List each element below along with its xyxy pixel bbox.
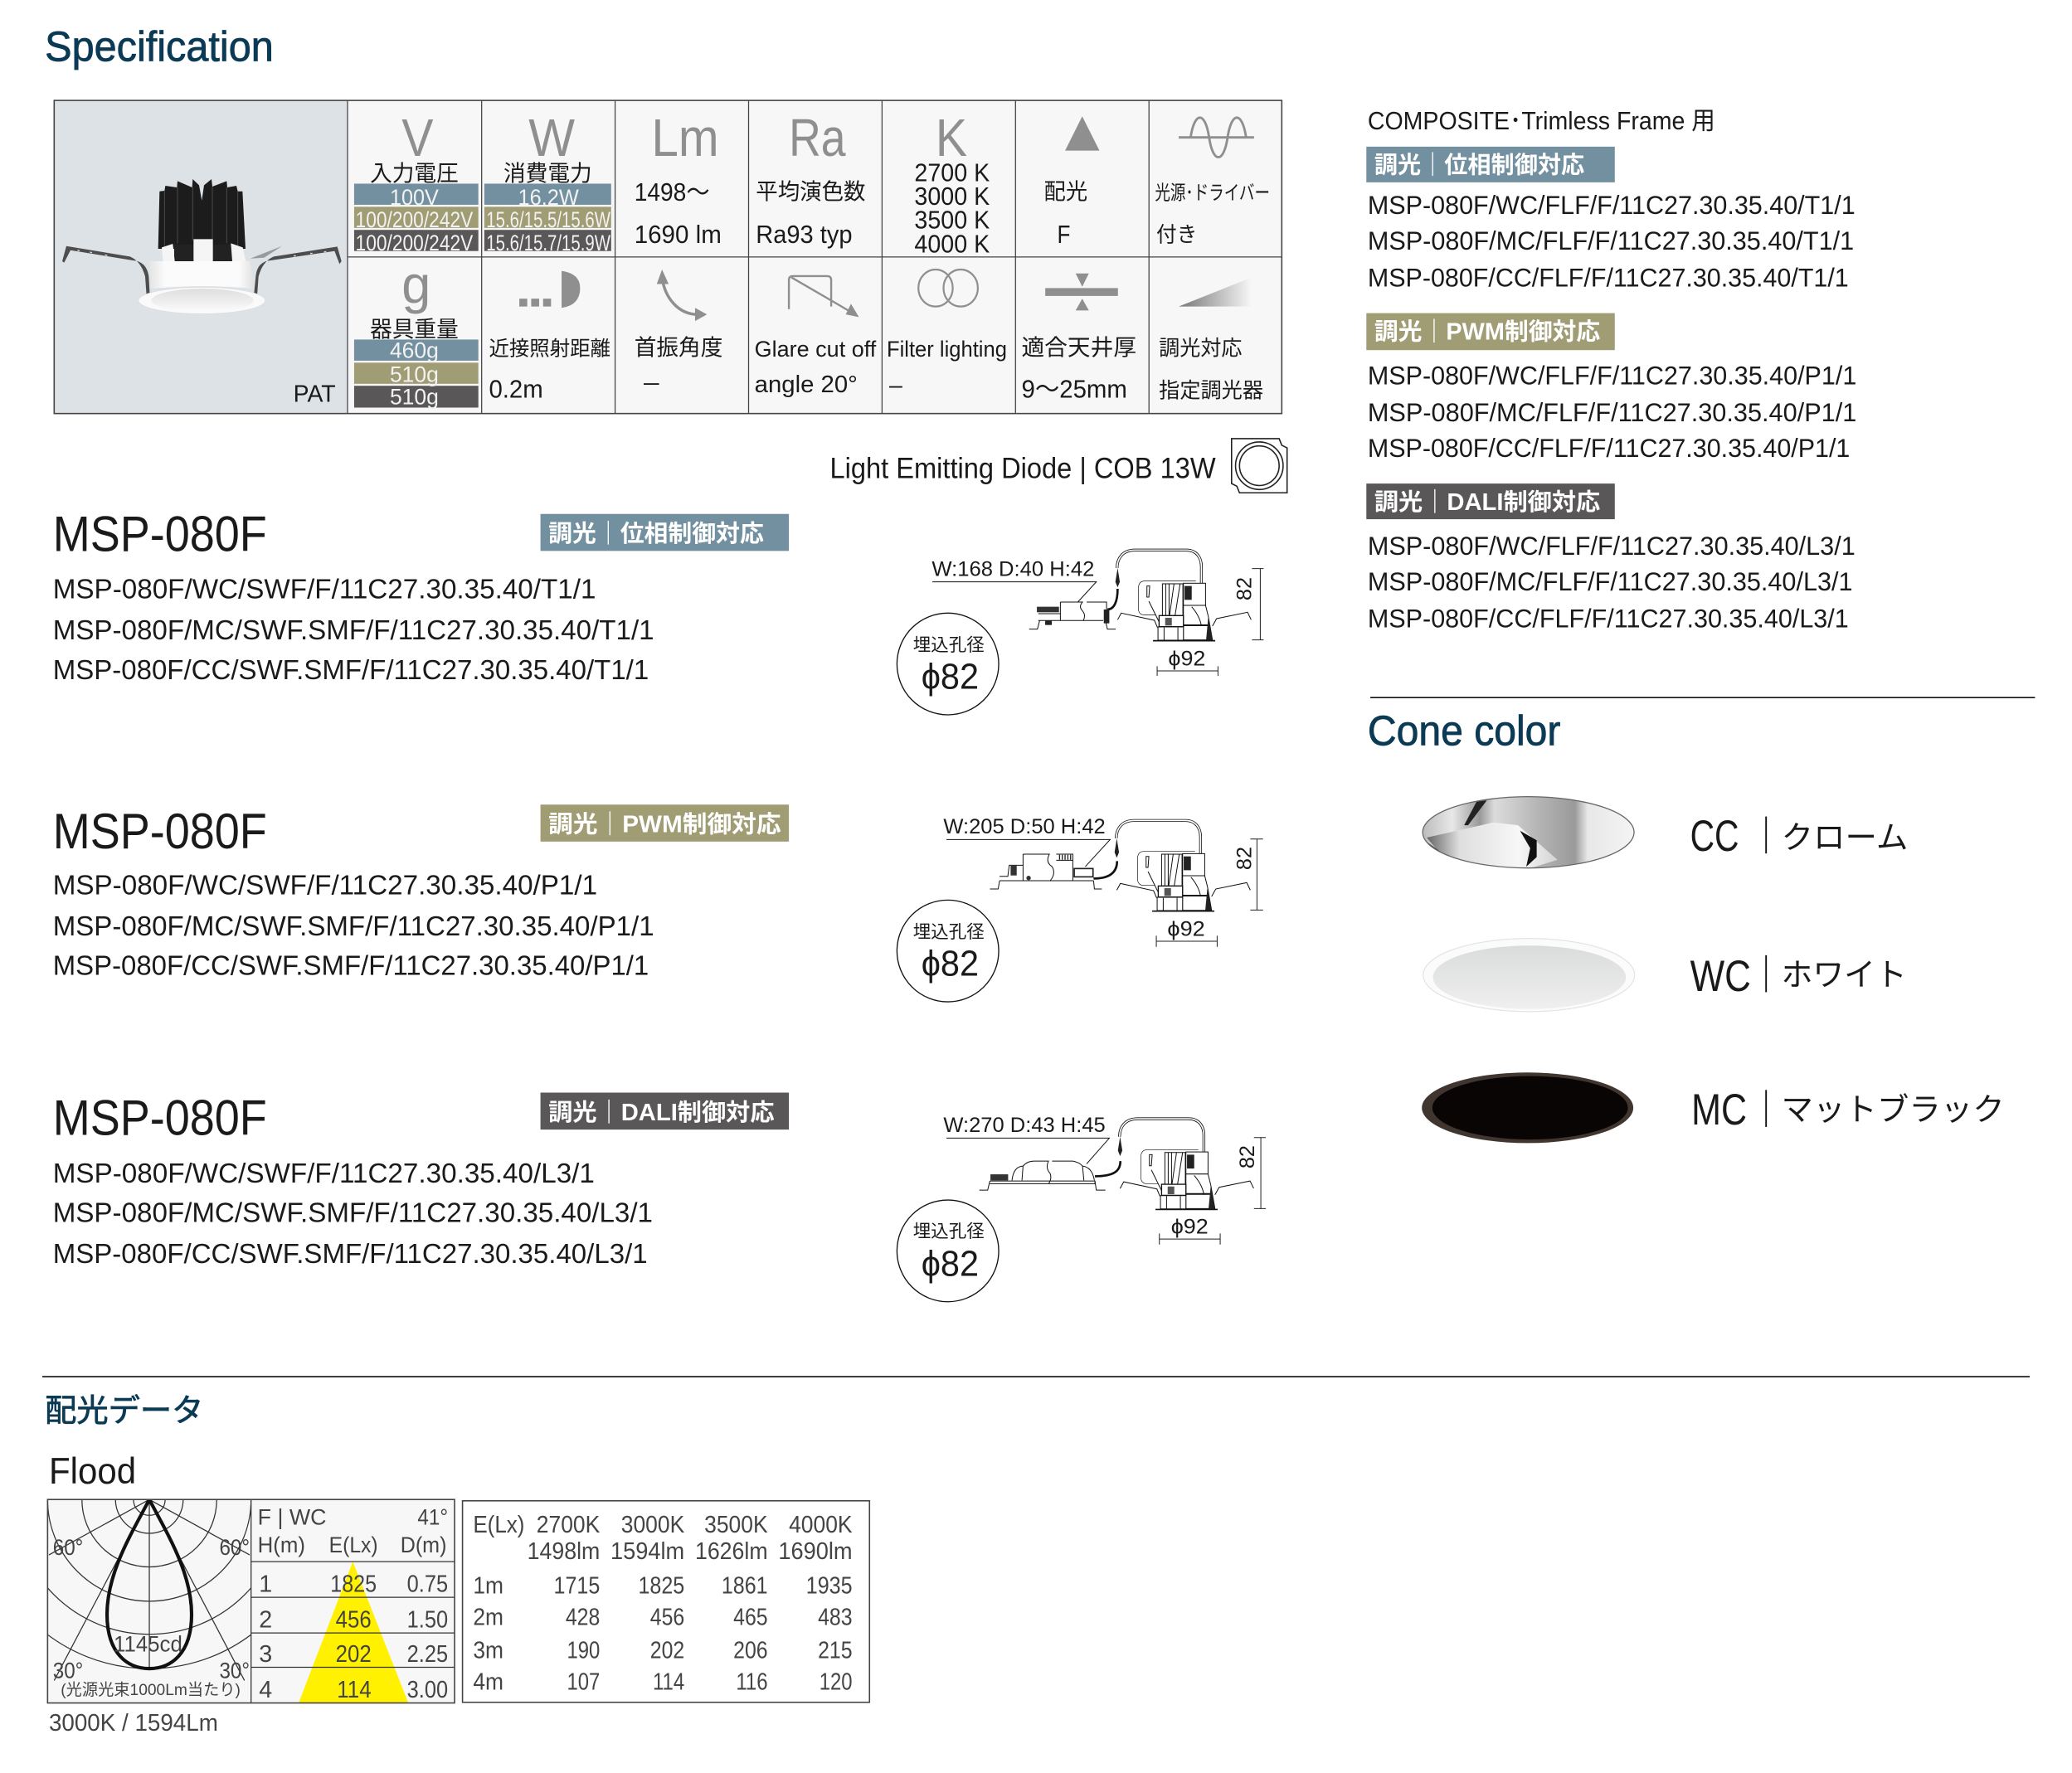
spec: close distance: 近接照射距離 — [489, 338, 610, 361]
model numbers — [53, 871, 654, 982]
table row 1m: 1m — [473, 1572, 503, 1599]
chart: illuminance cone table: D(m) — [401, 1532, 446, 1557]
spec: driver: 光源･ドライバー — [1155, 182, 1270, 205]
table row 4m: 107 — [567, 1669, 600, 1696]
spec: input voltage: 入力電圧 — [370, 160, 459, 186]
table header: 1594lm — [610, 1538, 684, 1565]
chart: polar light distribution: (光源光束1000Lm当たり) — [61, 1681, 241, 1699]
spec: filter lighting: Filter lighting — [887, 336, 1007, 362]
label: MC matte black: マットブラック — [1782, 1092, 2005, 1128]
panel: composite trimless frame models — [1366, 108, 1856, 634]
spec: power consumption — [484, 108, 611, 255]
spec: input voltage: 100/200/242V — [356, 230, 473, 255]
spec: tilt angle: − — [642, 373, 661, 396]
model numbers P1: MSP-080F/WC/FLF/F/11C27.30.35.40/P1/1 — [1368, 362, 1856, 391]
chart: illuminance cone table: 202 — [336, 1641, 372, 1668]
model numbers — [53, 575, 654, 686]
panel: flood chart — [46, 1499, 455, 1703]
spec: colour rendering — [756, 108, 865, 249]
tag: PWM control: 調光｜PWM制御対応 — [1374, 318, 1601, 345]
table row 3m — [473, 1637, 853, 1664]
model numbers T1: MSP-080F/WC/FLF/F/11C27.30.35.40/T1/1 — [1368, 191, 1856, 220]
label: WC white — [1690, 952, 1907, 1001]
heading: light distribution data: 配光データ — [45, 1393, 203, 1429]
tag: PWM control — [541, 804, 789, 842]
spec: glare cut off — [755, 276, 877, 398]
table row 4m: 114 — [653, 1669, 684, 1696]
block: DALI control model — [53, 1090, 1266, 1302]
table row 2m: 483 — [818, 1605, 853, 1631]
drawing: dimensions L3: ϕ92 — [1171, 1216, 1209, 1239]
label: WC white: ホワイト — [1782, 957, 1907, 993]
spec: luminous flux: Lm — [651, 108, 719, 168]
drawing: dimensions L3: W:270 D:43 H:45 — [943, 1114, 1106, 1137]
spec: tilt angle: 首振角度 — [635, 335, 722, 361]
heading: Cone color: Cone color — [1368, 707, 1560, 755]
spec: dimming: 指定調光器 — [1159, 380, 1263, 403]
table row 2m: 465 — [733, 1605, 768, 1631]
spec: weight: 器具重量 — [370, 316, 459, 342]
drawing: dimensions P1: 埋込孔径 — [913, 922, 985, 942]
chart: illuminance cone table: 2 — [259, 1607, 272, 1634]
model numbers T1: MSP-080F/MC/FLF/F/11C27.30.35.40/T1/1 — [1368, 226, 1854, 255]
table row 2m: 2m — [473, 1605, 503, 1631]
chart: polar light distribution: 30° — [53, 1657, 83, 1683]
table row 2m: 428 — [566, 1605, 600, 1631]
spec: power consumption: 16.2W — [518, 184, 579, 210]
spec: dimming: 調光対応 — [1159, 338, 1243, 361]
table row 2m: 456 — [650, 1605, 684, 1631]
model numbers: MSP-080F/MC/SWF.SMF/F/11C27.30.35.40/L3/1 — [53, 1198, 653, 1229]
model numbers: MSP-080F/WC/SWF/F/11C27.30.35.40/L3/1 — [53, 1159, 595, 1189]
panel: product photo — [54, 100, 348, 414]
tag: DALI control: 調光｜DALI制御対応 — [1374, 488, 1601, 516]
chart: polar light distribution: 60° — [219, 1534, 250, 1560]
model numbers L3: MSP-080F/CC/FLF/F/11C27.30.35.40/L3/1 — [1368, 605, 1849, 634]
spec: weight — [354, 255, 479, 410]
spec: weight: g — [401, 255, 430, 314]
drawing: dimensions P1: ϕ92 — [1167, 917, 1205, 940]
spec: input voltage — [354, 108, 479, 255]
chart: illuminance cone table — [251, 1499, 455, 1703]
label: CC chrome: クローム — [1782, 820, 1908, 856]
spec: tilt angle — [635, 270, 722, 396]
table row 3m: 202 — [650, 1637, 684, 1664]
label: WC white: WC — [1690, 952, 1751, 1001]
spec: input voltage: V — [401, 108, 434, 168]
model numbers: MSP-080F/CC/SWF.SMF/F/11C27.30.35.40/P1/1 — [53, 951, 649, 982]
spec: ceiling thickness — [1021, 274, 1136, 404]
model numbers — [53, 1159, 653, 1270]
spec: light distribution: F — [1057, 221, 1070, 249]
table header: 1498lm — [528, 1538, 600, 1565]
spec: colour temperature: 3500 K — [914, 207, 990, 235]
chart: illuminance cone table: 1.50 — [407, 1607, 448, 1634]
spec: ceiling thickness: 適合天井厚 — [1021, 335, 1136, 361]
model numbers T1: MSP-080F/CC/FLF/F/11C27.30.35.40/T1/1 — [1368, 264, 1849, 293]
spec: ceiling thickness: 9〜25mm — [1021, 376, 1127, 404]
table row 2m — [473, 1605, 853, 1631]
table header: 1690lm — [778, 1538, 853, 1565]
chart: illuminance cone table: E(Lx) — [329, 1532, 378, 1557]
swatch: matte black cone — [1422, 1072, 1633, 1143]
table row 3m: 206 — [733, 1637, 768, 1664]
chart: illuminance cone table: 456 — [336, 1607, 372, 1634]
spec: weight: 510g — [390, 384, 439, 410]
table row 4m: 4m — [473, 1669, 503, 1696]
chart: polar light distribution: 60° — [53, 1534, 83, 1560]
chart: illuminance cone table: 41° — [417, 1503, 448, 1529]
table row 3m: 3m — [473, 1637, 503, 1664]
table row 3m: 190 — [567, 1637, 600, 1664]
drawing: dimensions T1: 埋込孔径 — [913, 635, 985, 655]
spec: input voltage: 100V — [390, 184, 439, 210]
table header: E(Lx) — [473, 1512, 524, 1538]
table header — [473, 1512, 853, 1565]
tag: phase control — [1366, 147, 1615, 182]
model numbers L3: MSP-080F/WC/FLF/F/11C27.30.35.40/L3/1 — [1368, 532, 1856, 561]
spec: colour temperature: 4000 K — [914, 231, 990, 258]
table row 1m — [473, 1572, 853, 1599]
drawing: dimensions T1: ϕ92 — [1168, 647, 1205, 670]
tag: DALI control — [1366, 483, 1615, 519]
model numbers L3: MSP-080F/MC/FLF/F/11C27.30.35.40/L3/1 — [1368, 567, 1853, 596]
spec: filter lighting: − — [888, 376, 904, 399]
swatch: chrome cone — [1423, 797, 1634, 869]
drawing: dimensions P1: W:205 D:50 H:42 — [943, 815, 1106, 838]
model numbers P1: MSP-080F/MC/FLF/F/11C27.30.35.40/P1/1 — [1368, 398, 1856, 427]
spec: power consumption: 消費電力 — [503, 160, 592, 186]
chart: polar light distribution — [48, 1500, 250, 1698]
spec: colour temperature — [914, 108, 990, 258]
spec: glare cut off: Glare cut off — [755, 336, 877, 362]
model name: MSP-080F — [53, 1090, 267, 1146]
spec: colour rendering: 平均演色数 — [756, 179, 865, 205]
drawing: dimensions P1 — [897, 815, 1263, 1002]
chart: illuminance cone table: 4 — [259, 1677, 272, 1703]
drawing: dimensions P1: ϕ82 — [922, 944, 979, 984]
title: Specification: Specification — [45, 22, 274, 70]
model numbers: MSP-080F/WC/SWF/F/11C27.30.35.40/P1/1 — [53, 871, 597, 901]
spec: light distribution: 配光 — [1044, 179, 1087, 205]
spec: driver: 付き — [1156, 224, 1197, 247]
drawing: dimensions L3: 埋込孔径 — [913, 1222, 985, 1241]
spec: power consumption: 15.6/15.7/15.9W — [486, 230, 610, 255]
table header: 1626lm — [695, 1538, 768, 1565]
model numbers: MSP-080F/CC/SWF.SMF/F/11C27.30.35.40/L3/1 — [53, 1239, 648, 1270]
spec: colour temperature: 2700 K — [914, 159, 990, 187]
label: PAT: PAT — [294, 381, 336, 407]
spec: power consumption: 15.6/15.5/15.6W — [486, 206, 610, 232]
heading: Flood: Flood — [49, 1451, 136, 1492]
chart: illuminance cone table: F | WC — [258, 1503, 326, 1529]
table row 1m: 1825 — [638, 1572, 684, 1599]
tag: phase control: 調光｜位相制御対応 — [1374, 152, 1584, 179]
table row 1m: 1861 — [722, 1572, 768, 1599]
drawing: dimensions T1: 82 — [1233, 577, 1257, 600]
spec: luminous flux — [635, 108, 722, 249]
drawing: dimensions T1: W:168 D:40 H:42 — [931, 557, 1094, 580]
spec: colour rendering: Ra — [789, 108, 846, 168]
spec: driver — [1155, 118, 1270, 247]
spec: colour temperature: 3000 K — [914, 183, 990, 211]
model numbers: MSP-080F/WC/SWF/F/11C27.30.35.40/T1/1 — [53, 575, 596, 605]
spec: colour temperature: K — [936, 108, 967, 168]
tag: phase control: 調光｜位相制御対応 — [548, 520, 764, 547]
chart: illuminance cone table: 1 — [259, 1571, 272, 1598]
table row 4m: 120 — [820, 1669, 853, 1696]
chart: illuminance cone table: 2.25 — [407, 1641, 448, 1668]
tag: phase control — [541, 514, 789, 551]
spec: light distribution — [1044, 116, 1099, 249]
model numbers P1 — [1368, 362, 1856, 463]
spec: dimming — [1159, 278, 1263, 403]
model numbers T1 — [1368, 191, 1856, 293]
table row 1m: 1935 — [806, 1572, 853, 1599]
chart: illuminance cone table: 3.00 — [407, 1677, 448, 1703]
chart: illuminance cone table: H(m) — [258, 1532, 305, 1557]
panel: cone colors — [1422, 797, 2005, 1143]
drawing: dimensions T1 — [897, 550, 1263, 715]
caption: colour temperature and flux: 3000K / 1594Lm — [49, 1710, 218, 1737]
table row 4m — [473, 1669, 853, 1696]
spec: luminous flux: 1498〜 — [635, 179, 710, 206]
spec: power consumption: W — [528, 108, 575, 168]
spec: filter lighting — [887, 270, 1007, 399]
model numbers: MSP-080F/MC/SWF.SMF/F/11C27.30.35.40/P1/1 — [53, 911, 654, 942]
panel: illuminance table — [463, 1501, 869, 1703]
spec: input voltage: 100/200/242V — [356, 206, 473, 232]
model name: MSP-080F — [53, 505, 267, 561]
drawing: dimensions T1: ϕ82 — [922, 657, 979, 697]
table header: 2700K — [537, 1512, 600, 1538]
spec: weight: 460g — [390, 338, 439, 363]
panel: specification table — [54, 100, 1282, 414]
block: PWM control model — [53, 803, 1263, 1002]
LED source caption: Light Emitting Diode | COB 13W — [829, 453, 1216, 485]
drawing: dimensions P1: 82 — [1233, 847, 1257, 870]
tag: DALI control — [541, 1093, 789, 1129]
table row 3m: 215 — [818, 1637, 853, 1664]
model numbers: MSP-080F/MC/SWF.SMF/F/11C27.30.35.40/T1/1 — [53, 615, 654, 646]
drawing: dimensions L3 — [897, 1114, 1266, 1302]
drawing: dimensions L3: ϕ82 — [922, 1243, 979, 1284]
chart: illuminance cone table: 1825 — [330, 1571, 377, 1598]
icon: COB chip — [1232, 439, 1287, 493]
chart: illuminance cone table: 3 — [259, 1641, 272, 1668]
model numbers: MSP-080F/CC/SWF.SMF/F/11C27.30.35.40/T1/1 — [53, 655, 649, 686]
model numbers L3 — [1368, 532, 1856, 634]
block: phase control model — [53, 505, 1263, 715]
spec: colour rendering: Ra93 typ — [756, 221, 853, 249]
table row 4m: 116 — [736, 1669, 768, 1696]
swatch: white cone — [1423, 939, 1635, 1012]
spec: glare cut off: angle 20° — [755, 372, 858, 398]
table header: 3000K — [621, 1512, 684, 1538]
tag: PWM control — [1366, 313, 1615, 350]
label: CC chrome: CC — [1690, 812, 1739, 861]
model name: MSP-080F — [53, 803, 267, 859]
tag: DALI control: 調光｜DALI制御対応 — [548, 1099, 775, 1126]
chart: illuminance cone table: 0.75 — [407, 1571, 448, 1598]
label: CC chrome — [1690, 812, 1908, 861]
chart: polar light distribution: 30° — [219, 1657, 250, 1683]
table row 1m: 1715 — [554, 1572, 600, 1599]
spec: weight: 510g — [390, 361, 439, 386]
drawing: dimensions L3: 82 — [1236, 1145, 1259, 1168]
tag: PWM control: 調光｜PWM制御対応 — [548, 811, 781, 838]
chart: polar light distribution: 1145cd — [114, 1630, 182, 1656]
model numbers P1: MSP-080F/CC/FLF/F/11C27.30.35.40/P1/1 — [1368, 434, 1850, 463]
spec: close distance — [489, 271, 610, 404]
spec: close distance: 0.2m — [489, 376, 543, 404]
chart: illuminance cone table: 114 — [337, 1677, 372, 1703]
spec: luminous flux: 1690 lm — [635, 221, 722, 249]
heading: composite: COMPOSITE･Trimless Frame 用 — [1368, 108, 1715, 135]
table header: 3500K — [704, 1512, 768, 1538]
label: MC matte black: MC — [1691, 1086, 1747, 1134]
label: MC matte black — [1691, 1086, 2005, 1134]
table header: 4000K — [789, 1512, 853, 1538]
